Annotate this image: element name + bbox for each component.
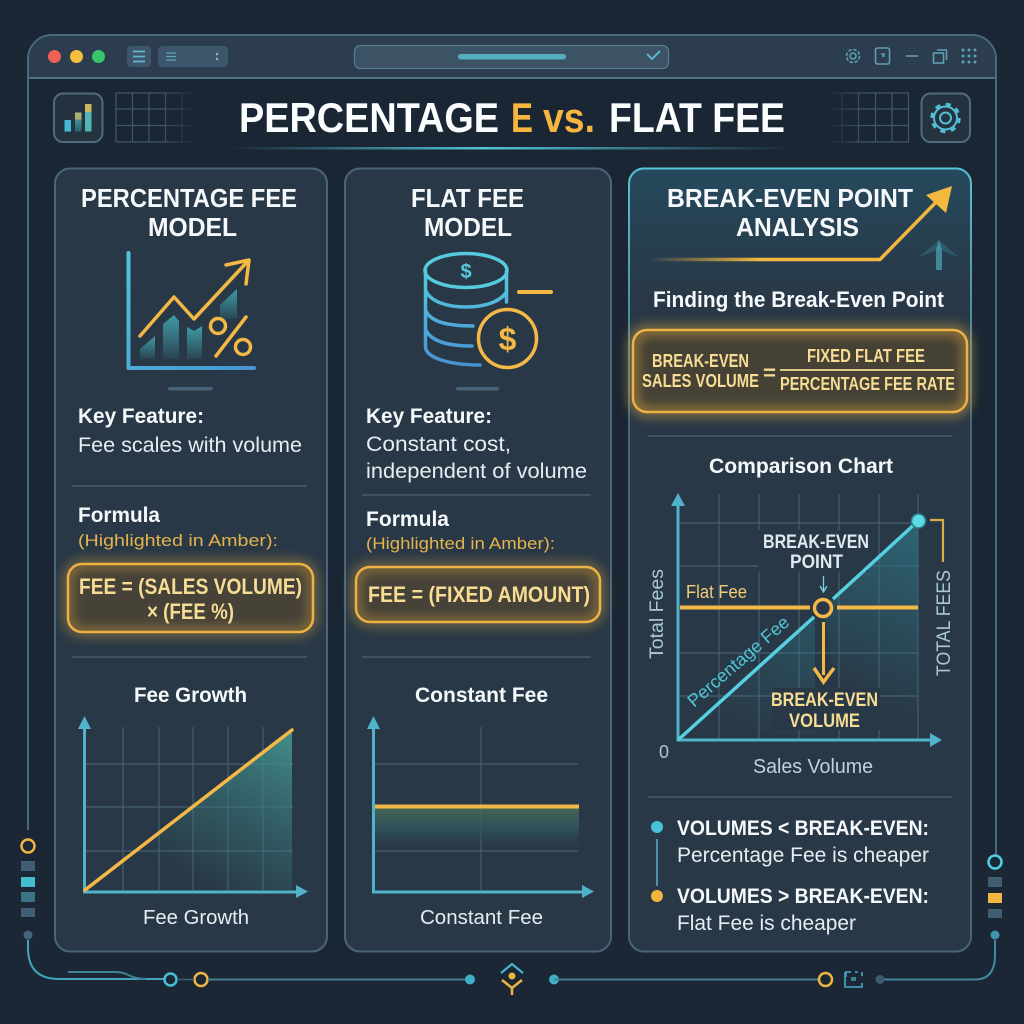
- header icon: bar chart: [54, 94, 102, 142]
- chart: fee comparison with break-even point: [647, 493, 955, 778]
- pointer arrow: [820, 576, 827, 592]
- title: E: [511, 94, 533, 141]
- panel heading: [667, 185, 913, 242]
- icon: growth chart with percent: [128, 253, 254, 390]
- window control dots: [48, 50, 105, 63]
- address bar: [354, 46, 668, 68]
- formula box: × (FEE %): [147, 599, 234, 624]
- formula box: break-even: =: [763, 362, 776, 385]
- amber drop arrow: [814, 622, 834, 682]
- key feature text: [78, 405, 302, 457]
- chart labels: TOTAL FEES: [934, 570, 955, 676]
- panel heading: ANALYSIS: [736, 214, 859, 242]
- panel: percentage fee model: [55, 168, 327, 952]
- formula label: Formula: [78, 504, 160, 527]
- chart caption: Fee Growth: [143, 907, 249, 929]
- formula label: Formula: [366, 508, 449, 531]
- key feature text: [366, 405, 587, 483]
- formula box: break-even: [633, 330, 967, 412]
- arrow: rising amber trend: [648, 186, 952, 260]
- title: PERCENTAGE: [239, 94, 499, 141]
- chart labels: VOLUME: [789, 711, 860, 732]
- left side rail decoration: [21, 840, 35, 940]
- note: volumes above break-even: VOLUMES > BREAK-EVEN:: [677, 884, 929, 908]
- formula box: break-even: FIXED FLAT FEE: [807, 345, 925, 366]
- amber bracket: [930, 520, 943, 562]
- line chart: fee growth: [78, 716, 308, 898]
- formula label: (Highlighted in Amber):: [366, 534, 555, 553]
- panel heading: BREAK-EVEN POINT: [667, 185, 913, 213]
- key feature text: Fee scales with volume: [78, 434, 302, 457]
- formula label: [366, 508, 555, 553]
- formula box: break-even: PERCENTAGE FEE RATE: [780, 373, 955, 394]
- icon: bottom centre emblem: [501, 964, 523, 995]
- window title bar: [28, 36, 996, 78]
- section heading: Finding the Break-Even Point: [653, 287, 945, 312]
- chart heading: Constant Fee: [415, 683, 548, 707]
- title: FLAT FEE: [609, 94, 785, 141]
- chart heading: Comparison Chart: [709, 454, 893, 478]
- icon: small cyan up arrow: [919, 240, 958, 270]
- chart caption: Constant Fee: [420, 907, 543, 929]
- note: volumes above break-even: [677, 884, 929, 935]
- panel heading: [81, 185, 297, 242]
- icon: menu button: [127, 46, 151, 67]
- title: vs.: [543, 94, 595, 141]
- key feature text: independent of volume: [366, 460, 587, 483]
- chart labels: BREAK-EVEN: [763, 532, 869, 553]
- line chart: constant fee: [367, 716, 594, 898]
- icon: coin stack with dollar coin: [425, 254, 551, 390]
- key feature text: Key Feature:: [78, 405, 204, 428]
- note: volumes above break-even: Flat Fee is cheaper: [677, 912, 856, 935]
- legend bullets: [651, 821, 663, 902]
- panel heading: [411, 185, 524, 242]
- formula box: FEE = (SALES VOLUME): [79, 574, 302, 599]
- note: volumes below break-even: Percentage Fee is cheaper: [677, 844, 929, 867]
- chart labels: Flat Fee: [686, 582, 747, 602]
- panel heading: PERCENTAGE FEE: [81, 185, 297, 213]
- chart labels: Percentage Fee: [684, 612, 793, 711]
- key feature text: Constant cost,: [366, 433, 511, 456]
- formula label: (Highlighted in Amber):: [78, 531, 278, 550]
- chart labels: 0: [659, 742, 669, 762]
- toolbar icons: [846, 48, 976, 64]
- chart labels: Sales Volume: [753, 756, 873, 778]
- decorative grid right: [828, 93, 908, 142]
- cyan percentage fee line: [678, 521, 918, 740]
- panel heading: FLAT FEE: [411, 185, 524, 213]
- icon: coin stack with dollar coin: $: [499, 321, 517, 357]
- formula box: break-even: SALES VOLUME: [642, 370, 759, 391]
- header icon: gear: [922, 94, 970, 142]
- bottom circuit line left: [28, 940, 475, 986]
- formula box: [68, 564, 313, 632]
- title: [239, 94, 785, 141]
- decorative grid left: [116, 93, 197, 142]
- chart labels: POINT: [790, 552, 843, 573]
- formula box: FEE = (FIXED AMOUNT): [368, 582, 590, 607]
- chart labels: [647, 532, 955, 778]
- amber flat fee line: [680, 606, 918, 610]
- break-even marker: [814, 600, 832, 616]
- formula label: [78, 504, 278, 550]
- panel heading: MODEL: [424, 214, 512, 242]
- panel: flat fee model: [345, 168, 611, 952]
- formula box: [356, 567, 600, 622]
- bottom circuit line right: [549, 940, 995, 987]
- note: volumes below break-even: VOLUMES < BREAK-EVEN:: [677, 816, 929, 840]
- tab button: [158, 46, 228, 67]
- title underline: [230, 147, 795, 150]
- end point: [912, 514, 926, 528]
- note: volumes below break-even: [677, 816, 929, 867]
- chart heading: Fee Growth: [134, 683, 247, 707]
- key feature text: Key Feature:: [366, 405, 492, 428]
- panel heading: MODEL: [148, 214, 237, 242]
- right side rail decoration: [988, 856, 1002, 940]
- panel: break-even point analysis: [629, 168, 971, 952]
- chart labels: BREAK-EVEN: [771, 690, 878, 711]
- formula box: break-even: BREAK-EVEN: [652, 350, 749, 371]
- icon: coin stack with dollar coin: $: [460, 261, 472, 283]
- chart labels: Total Fees: [647, 569, 668, 659]
